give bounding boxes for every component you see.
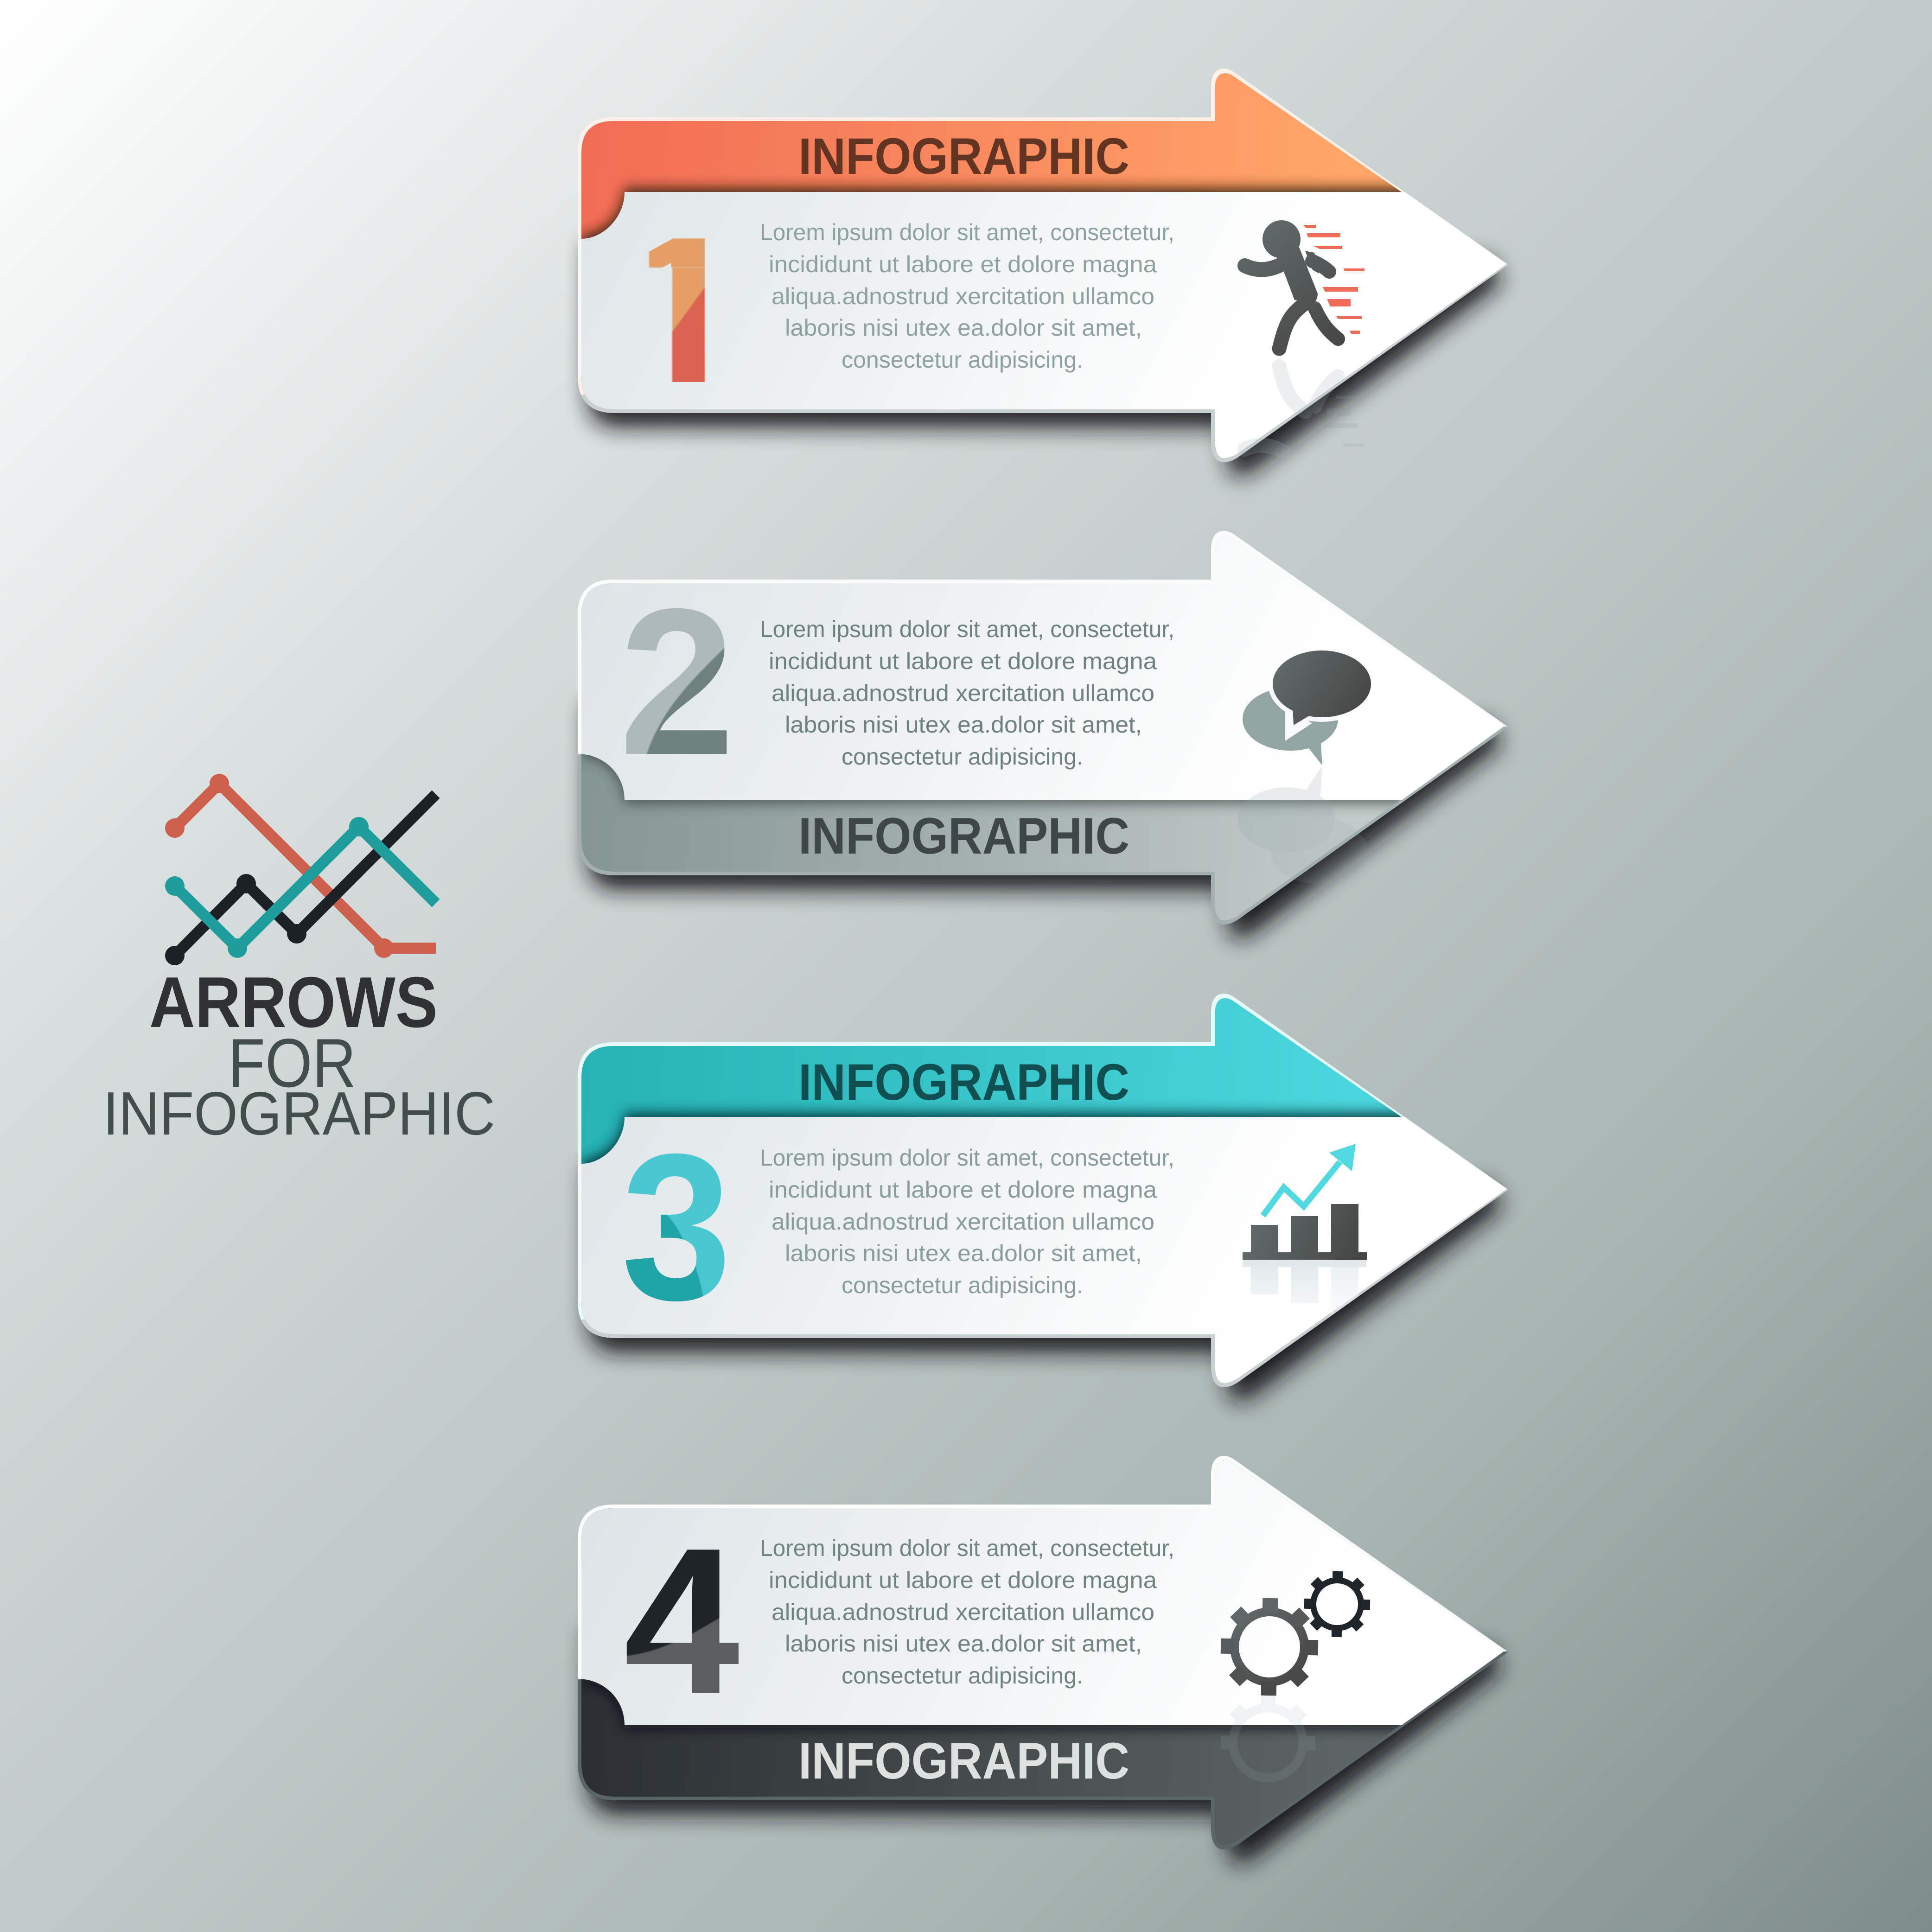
title: arrows: ARROWS — [149, 962, 438, 1042]
body text — [760, 616, 1174, 770]
heading: INFOGRAPHIC — [798, 1054, 1129, 1111]
icon: speech bubbles — [1243, 646, 1376, 765]
body text: incididunt ut labore et dolore magna — [769, 251, 1157, 277]
body text: Lorem ipsum dolor sit amet, consectetur, — [760, 616, 1174, 642]
number 2: 2 — [619, 566, 735, 798]
body text: consectetur adipisicing. — [842, 744, 1083, 770]
body text: laboris nisi utex ea.dolor sit amet, — [785, 1240, 1142, 1266]
body text — [760, 219, 1174, 373]
speed dashes — [1303, 225, 1365, 334]
body text: aliqua.adnostrud xercitation ullamco — [772, 1599, 1154, 1625]
icon: runner — [1245, 220, 1365, 349]
body text: Lorem ipsum dolor sit amet, consectetur, — [760, 219, 1174, 245]
body text — [760, 1535, 1174, 1689]
body text: aliqua.adnostrud xercitation ullamco — [772, 283, 1154, 309]
body text: aliqua.adnostrud xercitation ullamco — [772, 1209, 1154, 1235]
panel: arrow 3 — [578, 994, 1508, 1401]
body text: incididunt ut labore et dolore magna — [769, 1567, 1157, 1593]
body text: Lorem ipsum dolor sit amet, consectetur, — [760, 1535, 1174, 1561]
panel: title logo — [103, 774, 495, 1148]
icon reflection: bar chart — [1243, 1260, 1366, 1316]
body text: Lorem ipsum dolor sit amet, consectetur, — [760, 1145, 1174, 1171]
body text: consectetur adipisicing. — [842, 1272, 1083, 1298]
body text — [760, 1145, 1174, 1298]
body text: consectetur adipisicing. — [842, 1663, 1083, 1689]
body text: incididunt ut labore et dolore magna — [769, 648, 1157, 674]
panel: arrow 4 — [578, 1456, 1508, 1863]
heading: INFOGRAPHIC — [798, 808, 1129, 865]
icon: gears — [1221, 1571, 1370, 1696]
arrow 3 body — [578, 994, 1508, 1401]
panel: arrow 2 — [578, 531, 1508, 938]
body text: laboris nisi utex ea.dolor sit amet, — [785, 1631, 1142, 1657]
line chart logo — [165, 774, 436, 965]
heading: INFOGRAPHIC — [798, 128, 1129, 185]
number 4: 4 — [624, 1505, 741, 1738]
body text: laboris nisi utex ea.dolor sit amet, — [785, 315, 1142, 341]
icon: bar chart with rising arrow — [1243, 1144, 1367, 1260]
title: infographic: INFOGRAPHIC — [103, 1079, 495, 1148]
arrow 2 body — [578, 531, 1508, 938]
icon reflection: runner — [1245, 366, 1365, 452]
arrow 1 body — [578, 69, 1508, 476]
icon reflection: gears — [1221, 1696, 1315, 1778]
number 3: 3 — [621, 1111, 732, 1344]
number 1: 1 — [613, 194, 751, 427]
body text: incididunt ut labore et dolore magna — [769, 1177, 1157, 1203]
body text: laboris nisi utex ea.dolor sit amet, — [785, 712, 1142, 738]
arrow 4 body — [578, 1456, 1508, 1863]
heading: INFOGRAPHIC — [798, 1733, 1129, 1790]
title: for: FOR — [228, 1024, 356, 1102]
body text: consectetur adipisicing. — [842, 347, 1083, 373]
panel: arrow 1 — [578, 69, 1508, 476]
body text: aliqua.adnostrud xercitation ullamco — [772, 680, 1154, 706]
icon reflection: speech bubbles — [1238, 765, 1367, 884]
